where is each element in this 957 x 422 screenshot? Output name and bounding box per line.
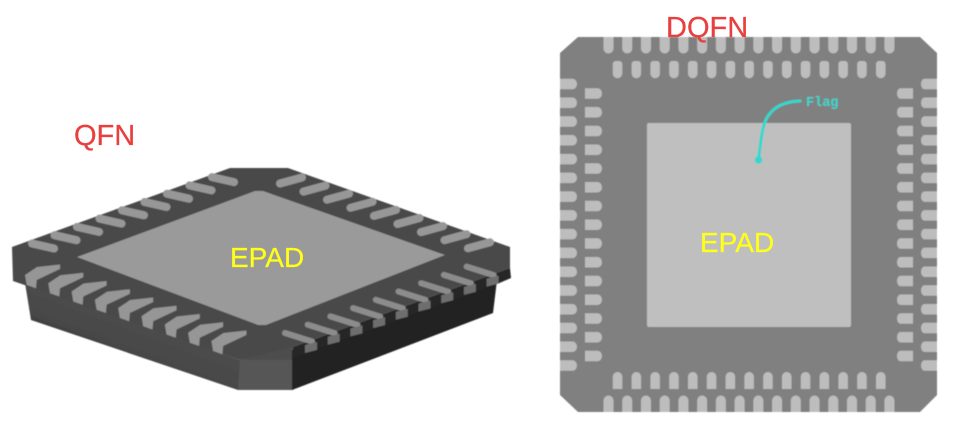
label: QFN: QFN [74,120,135,152]
pads: front-right edge tabs [305,276,499,353]
pads: bottom inner row [613,372,885,389]
pads: right inner row [897,88,913,361]
label: DQFN: DQFN [666,12,748,44]
top surface [12,168,510,360]
chip: DQFN top view [560,37,937,412]
exposed pad: QFN EPAD [77,191,445,325]
exposed pad: DQFN EPAD [647,123,851,327]
pads: bottom outer row [604,396,894,412]
pads: front-right stripes [285,267,494,342]
pads: left outer row [560,79,577,371]
pads: back-right row [280,178,490,248]
label: DQFN EPAD: EPAD [700,227,774,258]
chip: QFN 3D package [12,168,511,390]
pads: top inner row [613,61,885,78]
pads: back-left row [32,177,234,248]
front-left side wall [25,283,293,390]
pads: top outer row [604,37,894,54]
callout: flag label: Flag [806,96,838,111]
callout: flag leader line [758,101,800,160]
package body [560,37,937,412]
front-right side wall [292,280,497,390]
pads: left inner row [585,88,602,361]
front-right plate edge [293,268,511,358]
front corner facet [238,360,293,390]
callout: flag dot [755,156,762,164]
pads: front-left row [25,264,246,354]
label: QFN EPAD: EPAD [230,242,304,273]
pads: right outer row [921,79,937,371]
